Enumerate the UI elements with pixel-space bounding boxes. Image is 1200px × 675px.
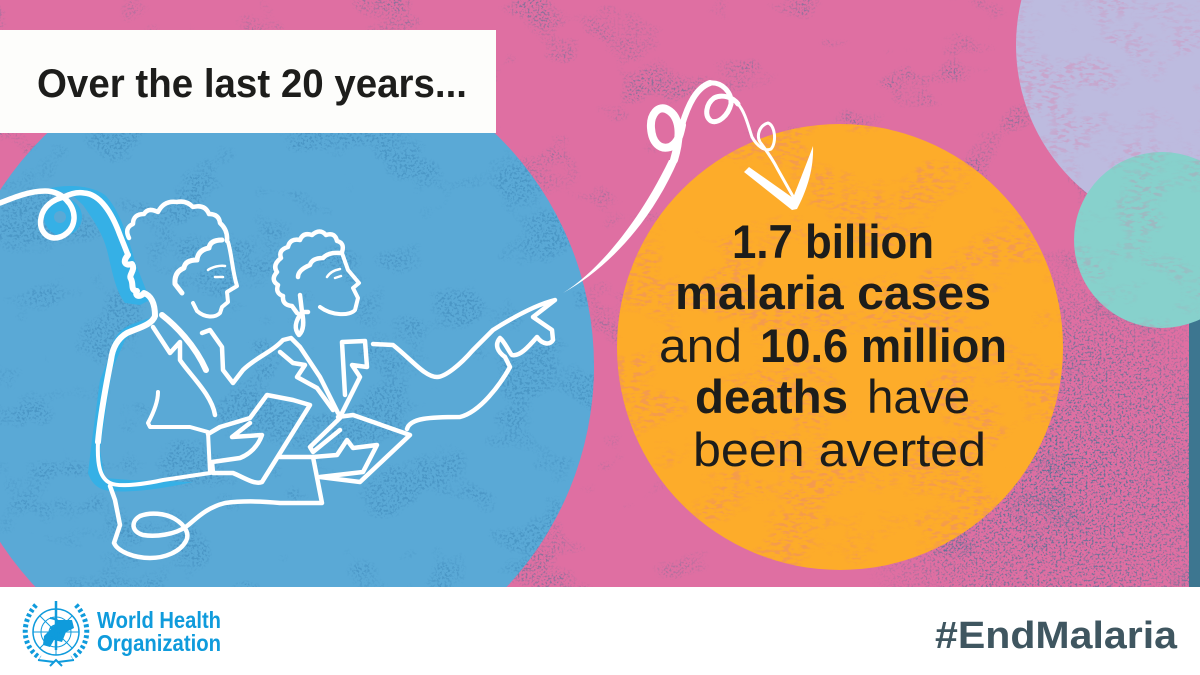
- woman 2 lapel: [280, 352, 333, 410]
- statistic text: 10.6 million: [760, 319, 1007, 372]
- woman 1 hairline: [175, 240, 222, 293]
- statistic text: malaria cases: [675, 266, 991, 319]
- woman 2 hairline: [298, 253, 340, 277]
- woman 2 brow and eye: [327, 269, 341, 278]
- arrow: curly arrow to orange circle: [563, 83, 813, 293]
- footer bar: [0, 587, 1200, 675]
- statistic text: been averted: [693, 423, 986, 476]
- dark teal strip at right edge: [1189, 300, 1200, 587]
- circle: orange: [615, 120, 1065, 575]
- statistic text: [659, 215, 1007, 476]
- inner circle of the blue shadow loop: [54, 211, 66, 223]
- woman 1 face: [193, 242, 237, 317]
- woman 2 hair: [274, 232, 343, 313]
- woman 1 brow and eye: [208, 266, 225, 277]
- title text: Over the last 20 years...: [37, 62, 467, 106]
- line from left edge into loop and shoulder: [0, 191, 128, 255]
- woman 2 shoulder and sleeve: [202, 330, 338, 413]
- figure: two women line drawing: [0, 191, 555, 558]
- woman 1 back and neck: [98, 255, 155, 442]
- woman 2 arm to pointing hand: [373, 300, 555, 429]
- woman 1 lower body: [110, 457, 322, 558]
- statistic text: 1.7 billion: [732, 215, 934, 268]
- woman 2 phone: [340, 341, 367, 417]
- woman 1 hand and tablet: [208, 395, 310, 483]
- WHO wordmark: World Health: [97, 607, 221, 633]
- WHO wordmark: Organization: [97, 630, 221, 656]
- woman 1 collar: [153, 327, 215, 415]
- icon: WHO emblem: [25, 601, 87, 666]
- statistic text: and: [659, 319, 742, 372]
- hashtag: #EndMalaria: [935, 615, 1178, 657]
- circle: blue: [0, 133, 594, 587]
- woman 1 arm and lap: [98, 392, 210, 485]
- WHO wordmark: [97, 607, 221, 656]
- woman 2 face: [320, 253, 359, 314]
- woman 2 earring: [296, 295, 308, 335]
- woman 1 hair: [127, 202, 227, 241]
- woman 2 book and hand: [310, 415, 410, 482]
- title box: [0, 30, 496, 133]
- statistic text: deaths: [695, 370, 848, 423]
- figure: bright blue shadow: [44, 186, 193, 491]
- circle: teal: [1070, 150, 1200, 330]
- statistic text: have: [867, 370, 970, 423]
- circle: lilac: [1016, 0, 1200, 194]
